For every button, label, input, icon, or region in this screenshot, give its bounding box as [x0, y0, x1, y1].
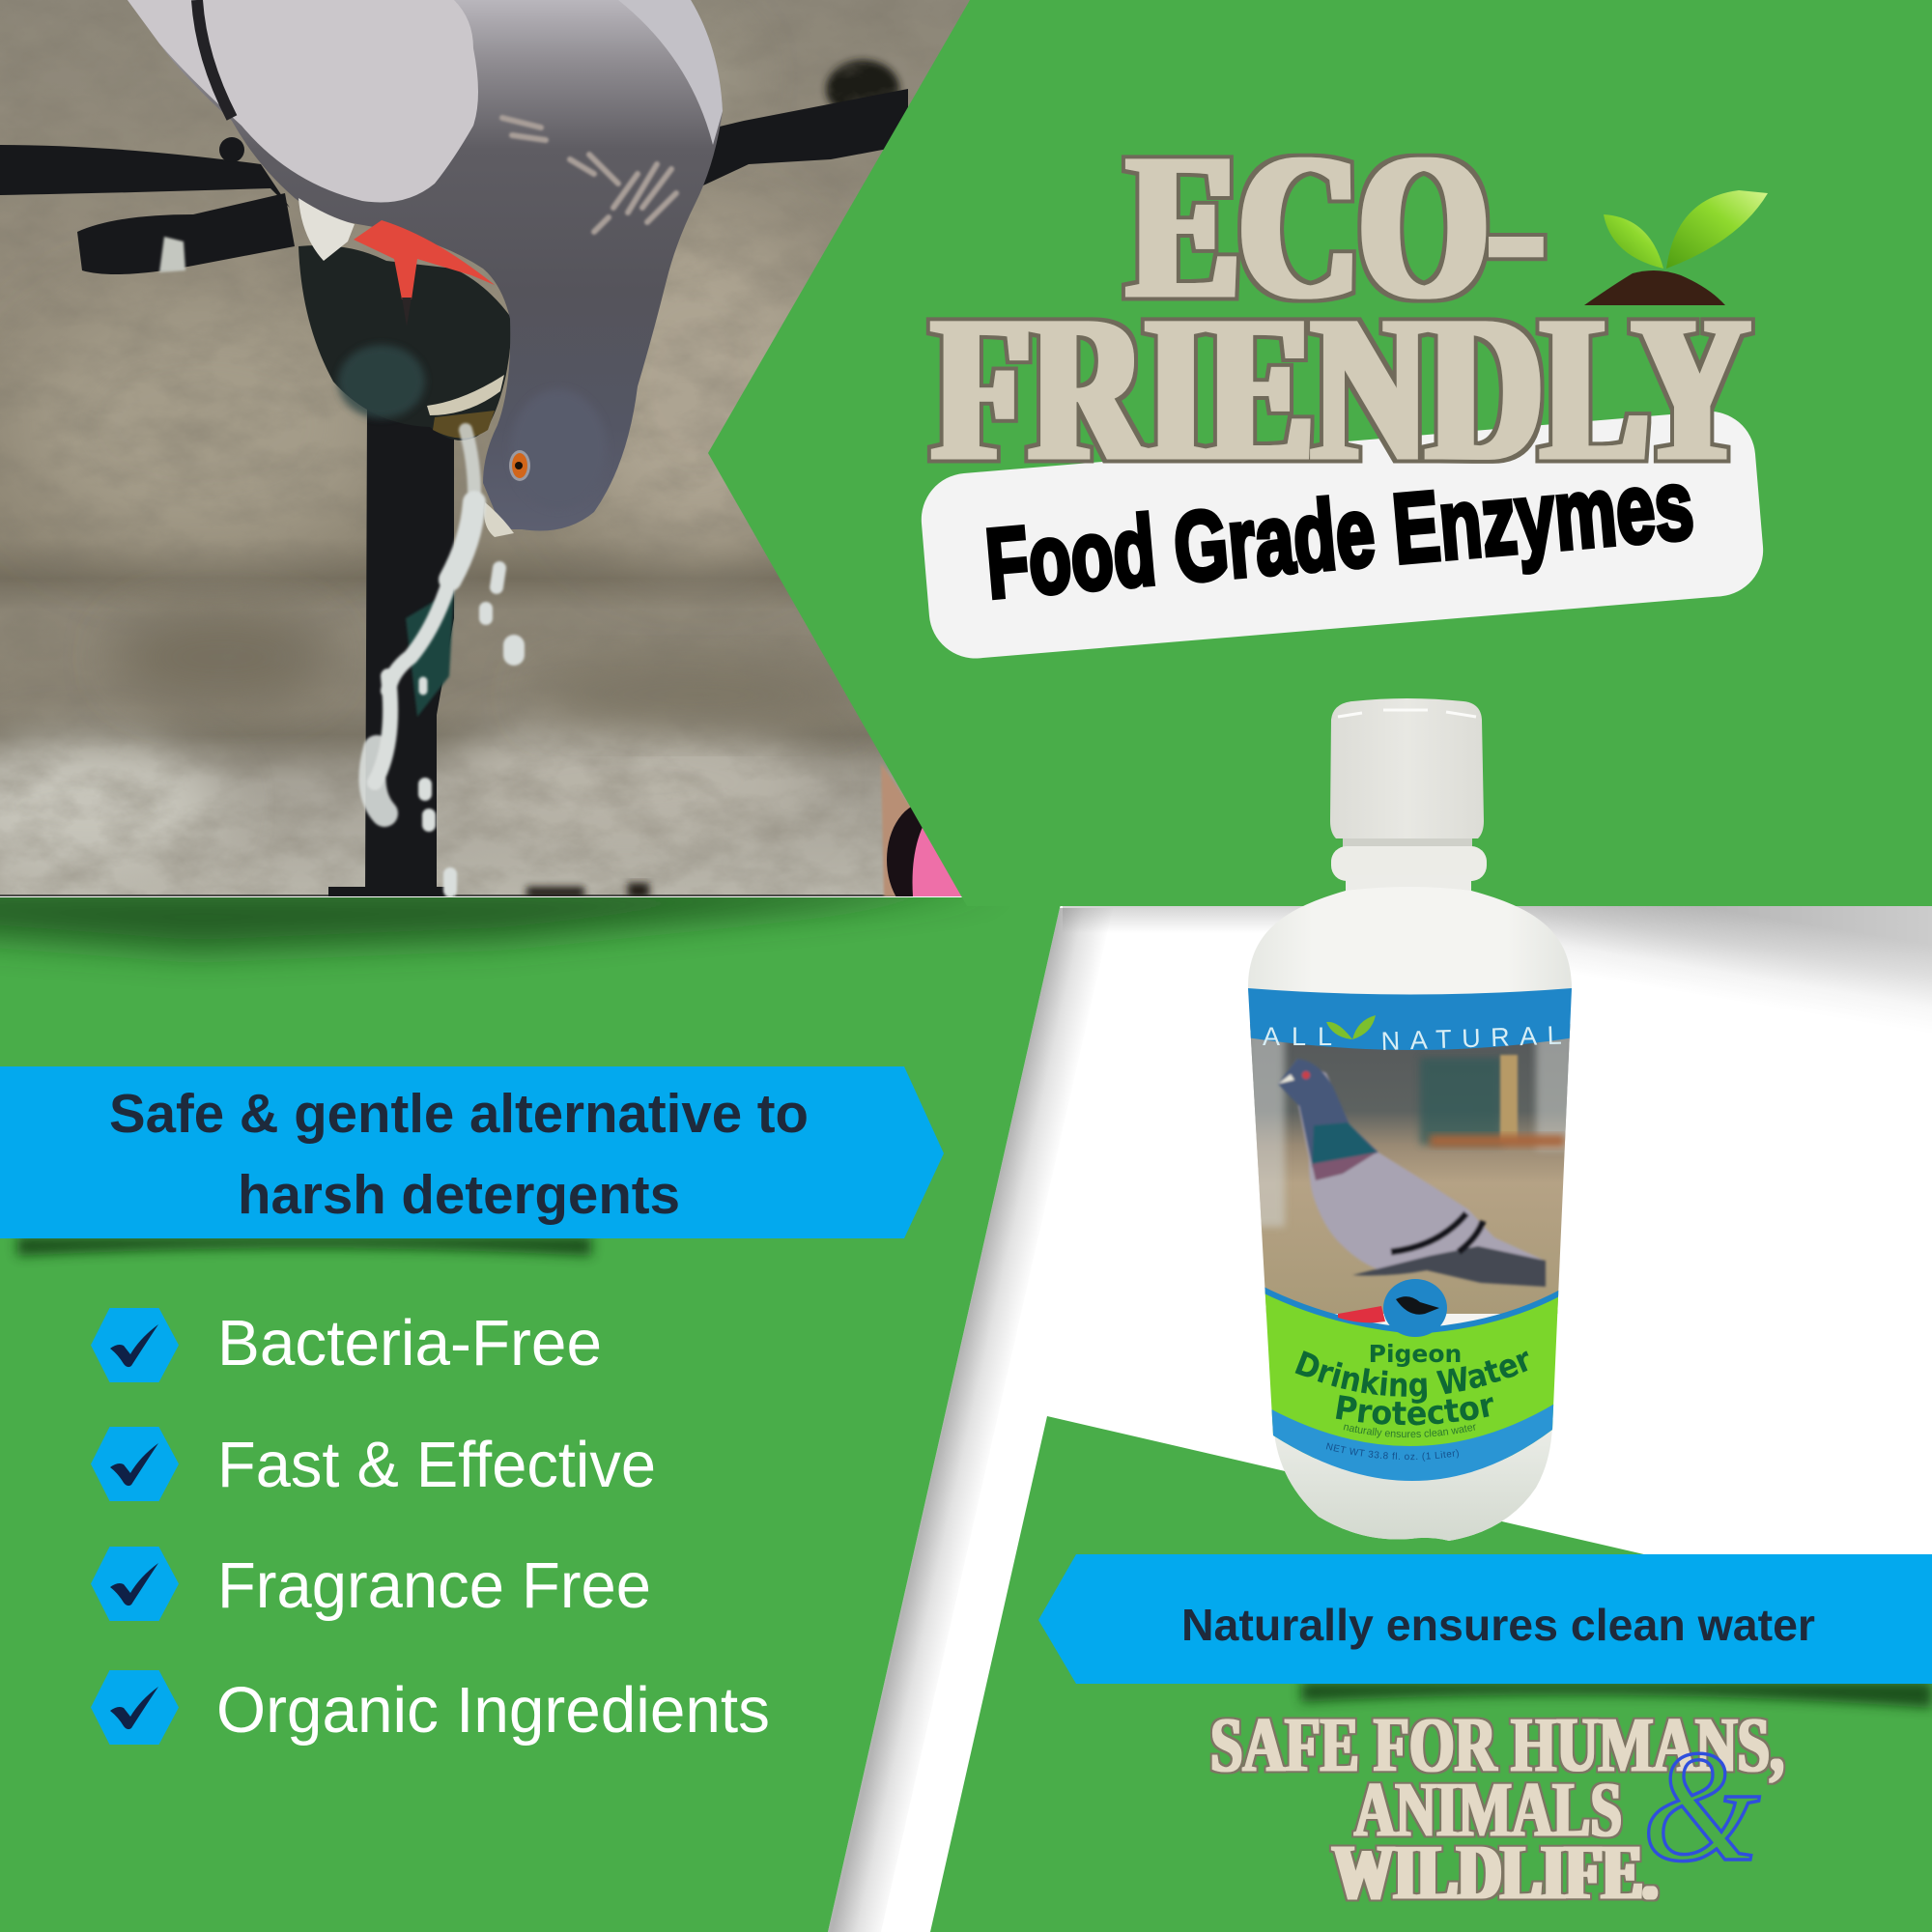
banner: left blue arrow — [0, 1066, 944, 1256]
banner shape — [0, 1066, 944, 1238]
label text: naturally ensures clean water: naturally ensures clean water — [1343, 1424, 1476, 1437]
heading line: ECO-: ECO- — [1128, 112, 1544, 341]
panel: upper right green arrow block — [708, 0, 1932, 906]
blurred stains at the wall base — [526, 883, 649, 898]
bottle base — [1273, 1420, 1552, 1541]
panel: left green block — [0, 897, 1063, 1932]
label circular logo — [1383, 1279, 1447, 1337]
label icon: leaves — [1326, 1015, 1376, 1039]
label red feet — [1338, 1306, 1385, 1322]
list item: Bacteria-Free: Bacteria-Free — [217, 1307, 602, 1379]
white rump and red foot — [298, 198, 495, 327]
fountain pipes and post — [0, 89, 908, 896]
tagline ampersand: & — [1642, 1718, 1760, 1894]
pigeon — [128, 0, 723, 537]
tagline line 2: ANIMALS — [1354, 1768, 1622, 1853]
label text: Protector: Protector — [1335, 1395, 1493, 1426]
label text: NATURAL: NATURAL — [1380, 1021, 1562, 1056]
pigeon head shading — [523, 392, 595, 425]
banner: right blue arrow — [1038, 1554, 1932, 1708]
label: tilted white tag — [918, 408, 1767, 662]
label text: Drinking Water: Drinking Water — [1294, 1350, 1528, 1404]
shadow below photo — [0, 884, 1005, 952]
banner shape — [1038, 1554, 1932, 1684]
banner shadow — [17, 1236, 591, 1256]
label green panel — [1246, 1281, 1575, 1459]
pigeon neck feathers — [502, 118, 676, 232]
panel: lower right green block — [930, 1416, 1932, 1932]
label text: ALL: ALL — [1263, 1022, 1344, 1051]
photo: pigeon drinking from a fountain — [0, 0, 976, 918]
bottle cap — [1330, 698, 1487, 896]
banner text line 2: harsh detergents — [238, 1164, 680, 1226]
label photo background — [1246, 1024, 1575, 1314]
label pigeon — [1278, 1059, 1546, 1287]
heading: ECO-FRIENDLY — [933, 112, 1748, 503]
pigeon wing — [128, 0, 478, 203]
bottle body — [1248, 887, 1572, 1541]
banner text: Naturally ensures clean water — [1181, 1600, 1815, 1650]
pigeon beak — [484, 502, 514, 537]
bottle label — [1248, 988, 1572, 1481]
label top blue band — [1246, 985, 1575, 1050]
paint flecks on the bracket — [159, 237, 185, 272]
pigeon eye — [509, 450, 530, 481]
label lower blue band — [1246, 1391, 1575, 1546]
list item: Fragrance Free: Fragrance Free — [217, 1549, 651, 1622]
pigeon wing bar — [197, 0, 232, 118]
label text: net weight: NET WT 33.8 fl. oz. (1 Liter) — [1325, 1443, 1459, 1462]
banner text line 1: Safe & gentle alternative to — [109, 1083, 809, 1145]
concrete wall — [0, 0, 976, 896]
list: features — [91, 1307, 770, 1747]
list item: Organic Ingredients: Organic Ingredients — [216, 1674, 770, 1747]
product: bottle — [1248, 698, 1572, 1541]
fountain teal section — [406, 589, 454, 717]
shadow along slanted green edge — [828, 908, 1113, 1932]
tagline line 3: WILDLIFE. — [1333, 1831, 1658, 1916]
fountain head — [298, 245, 512, 440]
shadow on white area, top right — [1063, 906, 1932, 1041]
pigeon shoulder — [618, 0, 723, 145]
label text: Pigeon: Pigeon — [1369, 1340, 1462, 1368]
tagline: Safe for humans, animals & wildlife — [1210, 1703, 1784, 1916]
icon: seedling — [1584, 190, 1768, 305]
list item: Fast & Effective: Fast & Effective — [217, 1429, 656, 1501]
pink object in background — [880, 764, 962, 896]
water stream — [373, 430, 514, 891]
banner shadow — [1301, 1682, 1932, 1708]
